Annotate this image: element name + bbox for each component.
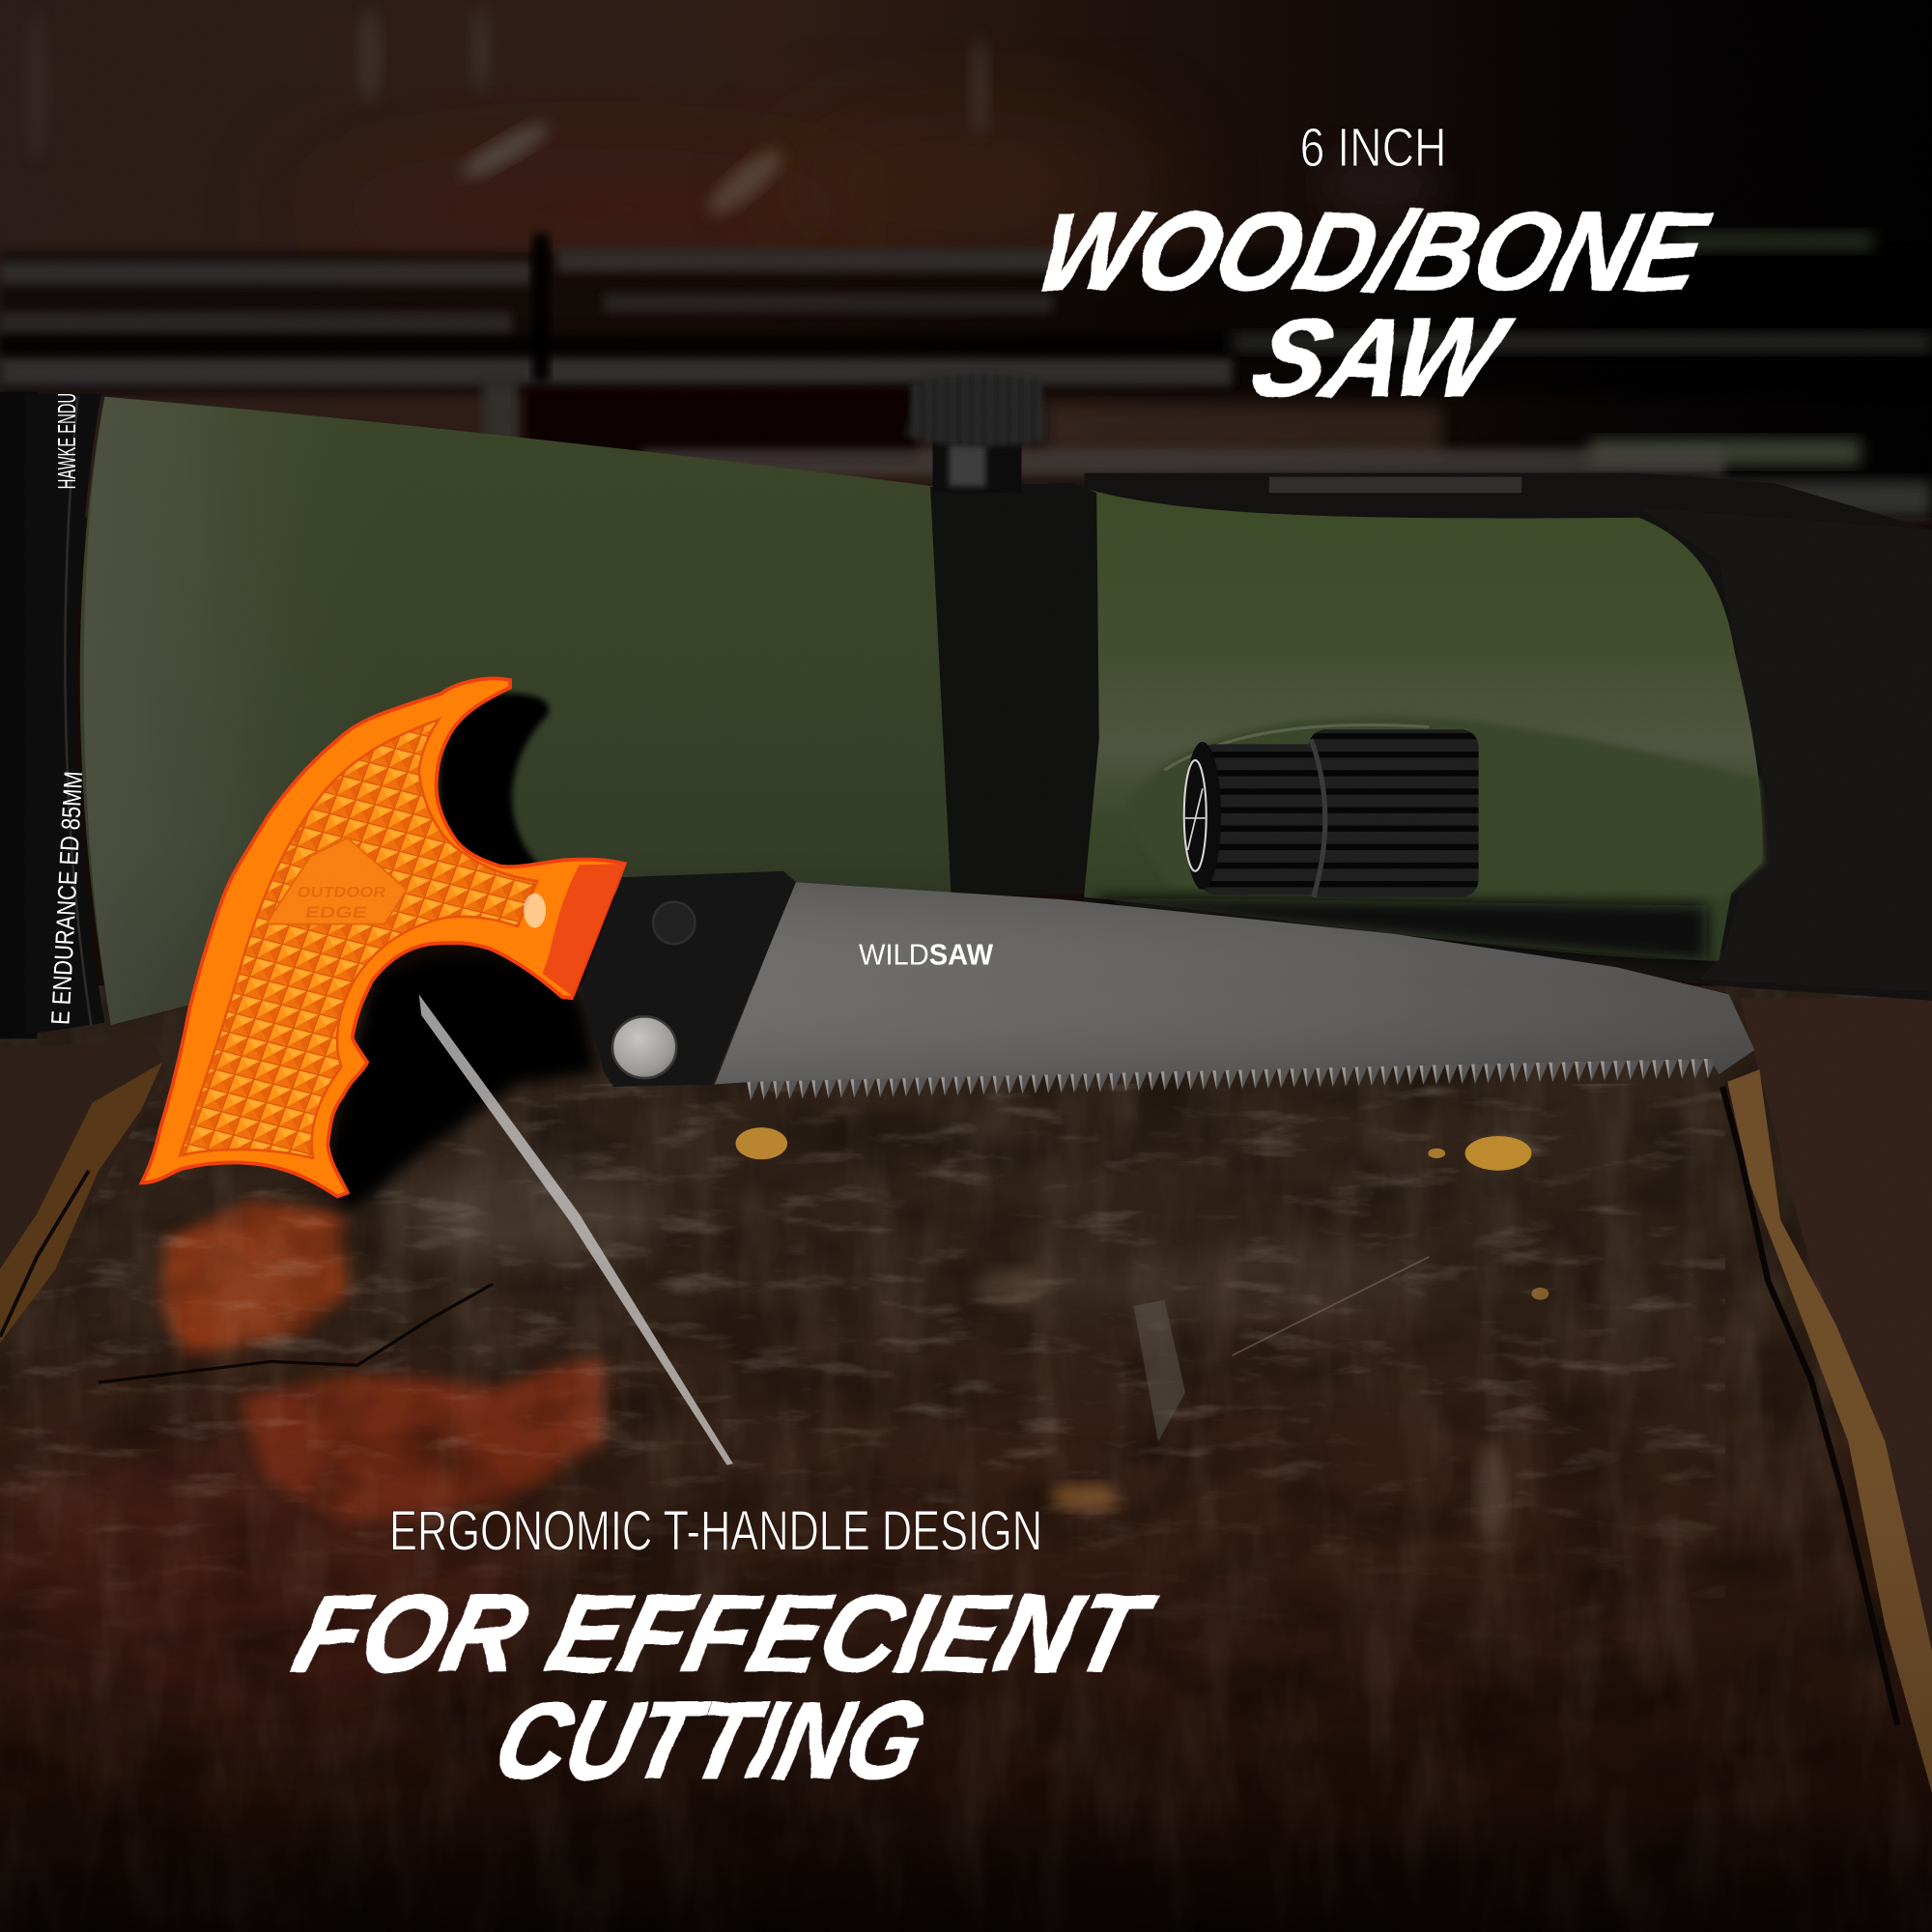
scope top knob [906, 374, 1045, 493]
saw blade teeth [747, 1059, 1716, 1101]
logo: Outdoor Edge: EDGE [304, 903, 368, 922]
scope rear rubber armour [1084, 473, 1932, 1001]
callout pointer line [419, 994, 733, 1465]
background: blurred rear wall [0, 0, 1932, 518]
spotting scope [0, 374, 1932, 1038]
saw blade [715, 882, 1754, 1084]
eyebrow: 6 INCH: 6 INCH [1300, 117, 1446, 178]
title line: cutting: CUTTING [485, 1681, 937, 1802]
logo: Outdoor Edge [267, 838, 407, 924]
background: wooden table planks [0, 985, 1932, 1932]
scope focus recess [1127, 716, 1765, 897]
scope rear green barrel [1078, 487, 1762, 961]
handle grip texture [180, 720, 537, 1158]
title line: for effecient: FOR EFFECIENT [284, 1574, 1164, 1694]
scope text upper: HAWKE ENDU [54, 393, 81, 489]
logo: Outdoor Edge: OUTDOOR [296, 885, 387, 901]
heading group: bottom [284, 1500, 1164, 1802]
title line: SAW: SAW [1242, 295, 1521, 419]
saw brand: WILDSAW [859, 939, 993, 972]
right plank gap [1722, 998, 1932, 1793]
left plank gap [0, 1041, 166, 1343]
handle end cap [542, 864, 625, 996]
shadow behind handle [327, 694, 598, 1213]
scope lens ring [0, 392, 104, 1038]
saw [142, 678, 1754, 1197]
scope text lower: E ENDURANCE ED 85MM [45, 771, 88, 1026]
scope main green barrel [80, 397, 952, 1025]
heading group: top [1027, 117, 1719, 419]
cracks and knot holes [99, 1127, 1548, 1540]
rust stain on table [0, 1202, 1676, 1749]
saw orange handle [142, 678, 625, 1197]
scope focus dial [1184, 729, 1479, 897]
scope engraved rear label [1269, 477, 1521, 493]
handle glint [524, 894, 546, 927]
title line: WOOD/BONE: WOOD/BONE [1027, 188, 1719, 313]
saw black bracket [582, 871, 796, 1087]
scope black band [930, 483, 1099, 897]
subheading: ergonomic T-handle: ERGONOMIC T-HANDLE DESIGN [389, 1500, 1042, 1563]
blurred smudges [25, 6, 1441, 224]
